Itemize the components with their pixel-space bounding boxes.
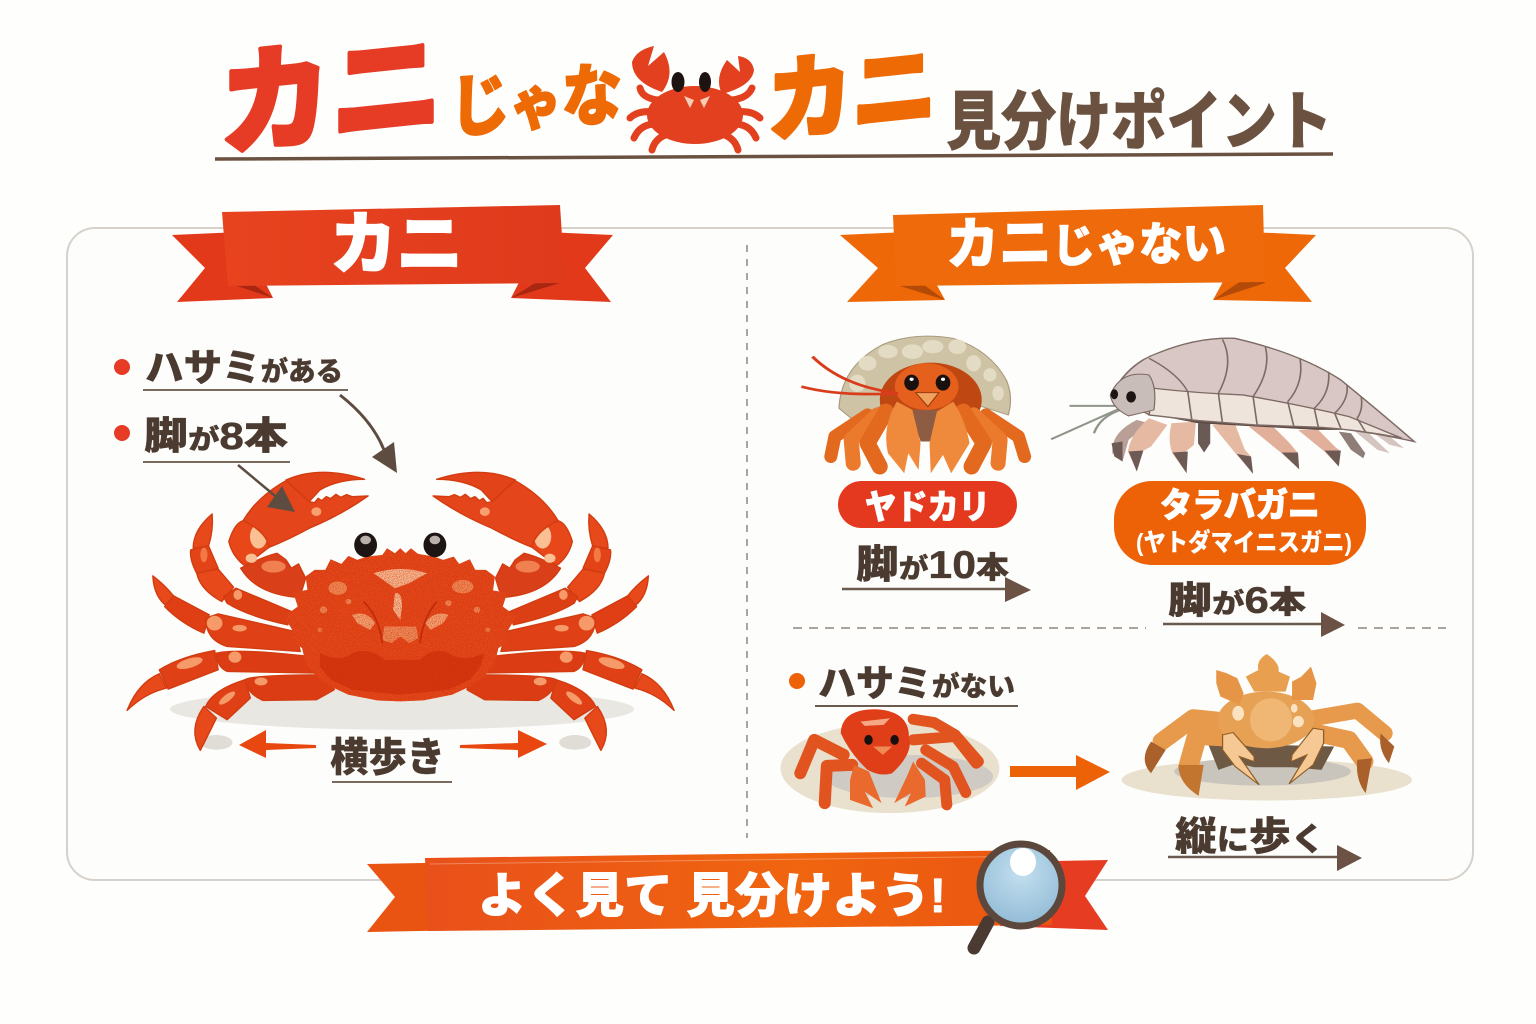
crab: main: [127, 472, 674, 750]
shell opening: [880, 363, 982, 437]
icon: hermit crab: [801, 336, 1025, 473]
eyes: [864, 735, 873, 745]
title word: じゃな: じゃな: [450, 56, 622, 147]
rostrum horns: [1246, 654, 1290, 692]
body: [841, 709, 910, 775]
legs: [800, 719, 978, 805]
icon: orange crab on sand: [1122, 654, 1412, 801]
label: 脚が10本: 脚が10本: [856, 544, 1009, 587]
callout: ハサミがある: ハサミがある: [145, 348, 343, 390]
back plates: [1112, 338, 1414, 442]
title underline: [215, 154, 1333, 159]
face: [895, 363, 959, 410]
hermit crab legs: [831, 412, 1025, 467]
head: [1110, 374, 1155, 416]
shell: [839, 336, 1011, 418]
label: 脚が10本: [842, 544, 1031, 602]
arrows: sideways walking: [239, 730, 547, 758]
chest: [910, 410, 945, 442]
legs: [1162, 711, 1385, 765]
ribbon: カニ: [172, 205, 613, 302]
title word: カニ red: カニ: [219, 19, 443, 172]
title word: 見分けポイント: 見分けポイント: [946, 86, 1332, 158]
callout: ハサミがない: ハサミがない: [818, 663, 1015, 704]
icon: magnifying glass: [974, 844, 1062, 948]
arrow: transition: [1010, 755, 1110, 790]
underside: [1129, 390, 1369, 430]
label pill: タラバガニ: (ヤトダマイニスガニ): [1136, 528, 1352, 557]
label pill: ヤドカリ: ヤドカリ: [865, 489, 990, 527]
callout: 脚が8本: [114, 416, 290, 462]
title: [219, 19, 1332, 172]
sand: [1122, 759, 1412, 801]
ribbon text: カニ: [330, 207, 463, 283]
arrow: to claw palm: [238, 465, 295, 512]
front pale legs: [1223, 733, 1259, 785]
divider horizontal: [793, 627, 1446, 629]
body: [1218, 692, 1314, 748]
dark claws: [1112, 442, 1341, 474]
icon: title crab: [630, 46, 760, 150]
label pill: タラバガニ: タラバガニ: [1160, 487, 1320, 525]
label: 脚が6本: [1163, 580, 1345, 637]
label: 横歩き: 横歩き: [330, 736, 445, 780]
icon: small crab on sand: [781, 709, 999, 813]
label: 縦に歩く: [1168, 816, 1362, 871]
legs: [1112, 418, 1404, 473]
icon: giant isopod: [1051, 338, 1414, 474]
underside: [1208, 743, 1334, 770]
ribbon: カニじゃない: [840, 205, 1316, 302]
carapace: [284, 548, 516, 701]
ground shadow: [170, 688, 634, 730]
right legs and claw: [433, 472, 674, 750]
title word: カニ orange: カニ: [767, 33, 937, 155]
divider vertical: [746, 245, 748, 838]
left legs and claw: [127, 472, 368, 750]
callout: 脚が8本: 脚が8本: [144, 416, 288, 458]
arrow: to claw, curved: [340, 395, 397, 473]
banner: よく見て見分けよう: [367, 850, 1108, 932]
antennae: [1051, 406, 1120, 439]
big claws: [886, 402, 921, 473]
panel: main card: [67, 228, 1473, 880]
label: 脚が6本: 脚 が6本: [1168, 580, 1306, 621]
banner text: よく見て 見分けよう!: [478, 870, 946, 923]
antennae: [801, 357, 898, 394]
label pill: タラバガニ: [1114, 481, 1366, 565]
crab eyes: [354, 533, 446, 557]
sand: [781, 723, 999, 813]
label: 縦に歩く: 縦に歩く: [1175, 816, 1325, 859]
label pill: ヤドカリ: [838, 481, 1017, 528]
ribbon text: カニじゃない: [946, 208, 1226, 276]
